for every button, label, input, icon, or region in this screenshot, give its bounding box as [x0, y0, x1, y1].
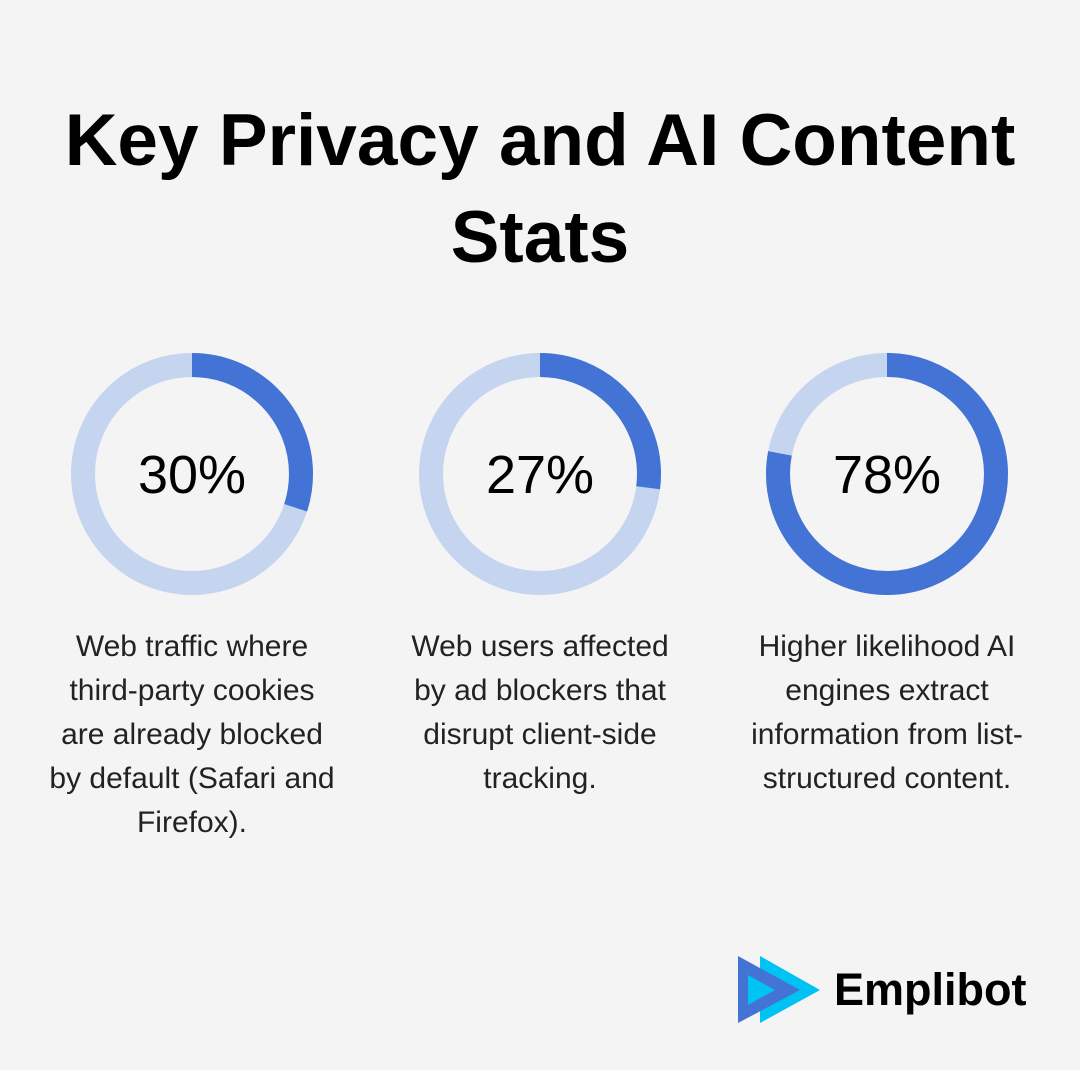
text: stat 1 description: Web traffic where third-party cookies are already blocked by default (Safari and Firefox). — [49, 630, 335, 839]
donut: 30% — [83, 365, 301, 583]
title: Stats — [451, 197, 629, 278]
text: stat 2 description: Web users affected by ad blockers that disrupt client-side tracking. — [411, 630, 669, 795]
title — [65, 100, 1015, 278]
text: stat 3 description: Higher likelihood AI engines extract information from list-structured content. — [751, 630, 1023, 795]
donut: 78% — [778, 365, 996, 583]
icon: play triangles — [738, 956, 820, 1023]
logo text: Emplibot — [834, 964, 1026, 1015]
title: Key Privacy and AI Content — [65, 100, 1015, 181]
donut: 27% — [431, 365, 649, 583]
logo: Emplibot — [738, 956, 1026, 1023]
donut charts — [71, 353, 1008, 595]
donut: 30%: 30% — [138, 445, 246, 505]
donut: 27%: 27% — [486, 445, 594, 505]
donut: 78%: 78% — [833, 445, 941, 505]
